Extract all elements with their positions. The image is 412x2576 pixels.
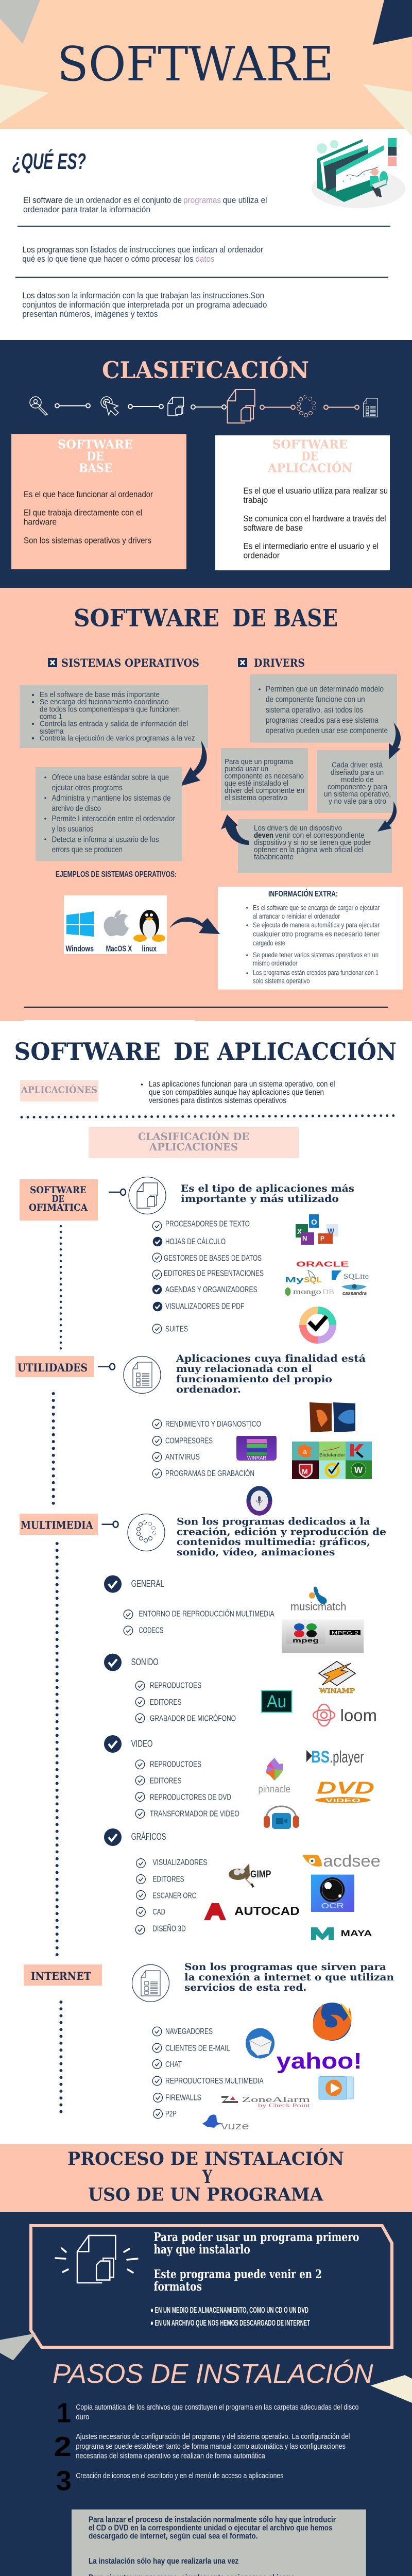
arrow xyxy=(169,917,220,934)
note: lanzar instalación: el CD o DVD en la correspondiente unidad o ejecutar el archivo que hemos xyxy=(89,2523,332,2532)
box: sistema operativo functions xyxy=(20,685,208,748)
icon row xyxy=(30,389,377,423)
logo: loom: loom xyxy=(340,1706,377,1725)
panel: información extra: mismo ordenador xyxy=(253,959,298,967)
logo: acdsee: acdsee xyxy=(323,1852,381,1870)
panel: información extra: Se ejecuta de manera automática y para ejecutar xyxy=(253,921,380,929)
box: each driver: y no vale para otro xyxy=(329,797,386,806)
box: drivers definition: programas creados para ese sistema xyxy=(266,716,379,725)
box: each driver: componente y para xyxy=(328,783,388,791)
list: multimedia categories: VIDEO xyxy=(131,1738,152,1749)
logo: dvd video: VIDEO xyxy=(325,1798,360,1804)
panel: software de aplicación: Es el intermediario entre el usuario y el xyxy=(243,541,379,551)
box: drivers requirement: componente es necesario xyxy=(225,772,304,781)
text: utilidades description: ordenador. xyxy=(176,1384,241,1395)
logo: windows media player xyxy=(319,2076,354,2099)
panel: información extra: solo sistema operativo xyxy=(253,977,310,985)
box: each driver: un sistema operativo, xyxy=(324,790,391,799)
labels: OS names: MacOS X xyxy=(106,945,132,954)
logos: antivirus grid: Bitdefender xyxy=(319,1452,345,1458)
text: instalar: Para poder usar un programa primero xyxy=(153,2230,359,2244)
intro text: software: ordenador para tratar la información xyxy=(23,205,150,214)
logo: thunderbird xyxy=(246,2028,274,2059)
logos: databases: My xyxy=(285,1276,304,1284)
icon: office logos xyxy=(296,1214,338,1245)
icon: microphone xyxy=(246,1486,272,1516)
text: internet description: servicios de esta red. xyxy=(184,1982,306,1993)
logo: mpeg: MPEG-2 xyxy=(332,1630,358,1635)
panel: OS logos xyxy=(64,895,167,954)
panel: software de aplicación: software de base xyxy=(243,523,303,533)
category: ofimática xyxy=(20,1177,369,1340)
logo: musicmatch xyxy=(290,1587,346,1613)
text: internet description: Son los programas que sirven para xyxy=(184,1961,386,1973)
list: multimedia categories: TRANSFORMADOR DE VIDEO xyxy=(150,1809,239,1818)
list: utilidades tools: ANTIVIRUS xyxy=(165,1453,200,1462)
box: drivers availability: optener en la página web oficial del xyxy=(254,845,364,854)
logos: antivirus grid: a xyxy=(303,1447,307,1455)
panel: software de aplicación: SOFTWARE xyxy=(272,438,348,452)
list: ofimática tools: GESTORES DE BASES DE DATOS xyxy=(164,1254,262,1263)
text: instalar: formatos xyxy=(153,2280,202,2294)
list: multimedia categories xyxy=(104,1575,274,1934)
tag: multimedia xyxy=(20,1514,98,1535)
box: sistema operativo functions: de todos los componentespara que funcionen xyxy=(40,705,180,714)
logos: databases: ORACLE xyxy=(296,1260,349,1268)
logo: autocad: AUTOCAD xyxy=(234,1904,300,1918)
text: ofimática description: importante y más utilizado xyxy=(181,1193,339,1205)
tag: software de ofimática: DE xyxy=(52,1193,64,1205)
box: sistema operativo tasks: errors que se producen xyxy=(52,845,123,854)
box: drivers requirement: driver del componente en xyxy=(225,786,304,795)
text: internet description: la conexión a internet o que utilizan xyxy=(184,1972,394,1983)
tag: aplicaciones xyxy=(20,1080,98,1101)
tag: software de ofimática: SOFTWARE xyxy=(30,1184,87,1196)
logo: pinnacle: pinnacle xyxy=(259,1784,290,1795)
text: aplicaciones description xyxy=(141,1080,335,1105)
panel: software de base: Es el que hace funcionar al ordenador xyxy=(24,489,153,499)
intro text: software: que utiliza el xyxy=(223,195,267,205)
list: ofimática tools: PROCESADORES DE TEXTO xyxy=(165,1220,250,1228)
text: formatos list: ● EN UN MEDIO DE ALMACENAMIENTO, COMO UN CD O UN DVD xyxy=(150,2306,308,2315)
box: sistema operativo tasks: Administra y mantiene los sistemas de xyxy=(52,794,171,803)
heading: clasificación: CLASIFICACIÓN xyxy=(102,357,309,384)
logo: dvd video xyxy=(315,1778,374,1804)
tag: internet xyxy=(24,1964,102,1986)
labels: OS names: linux xyxy=(142,945,157,954)
text: formatos list xyxy=(150,2306,310,2328)
list: internet tools: CHAT xyxy=(165,2060,182,2069)
box: sistema operativo functions: sistema xyxy=(40,727,64,736)
panel: software de base: hardware xyxy=(24,517,57,527)
list: multimedia categories: EDITORES xyxy=(150,1776,182,1786)
panel: proceso de instalación heading xyxy=(0,2144,412,2212)
panel: información extra: cualquier otro programa es necesario tener xyxy=(253,930,380,938)
text: utilidades description: muy relacionada con el xyxy=(176,1363,312,1375)
panel: información extra: al arrancar o reiniciar el ordenador xyxy=(253,912,340,920)
intro text: datos xyxy=(22,291,267,319)
steps: instalación: necesarias del sistema operativo se realizan de forma automática xyxy=(76,2452,265,2461)
steps: instalación: Ajustes necesarios de configuración del programa y del sistema operativo. La configuración del xyxy=(76,2432,350,2441)
callout: formats xyxy=(31,2226,392,2347)
subheading: drivers: DRIVERS xyxy=(254,656,305,669)
logo: ocr app: OCR xyxy=(321,1902,344,1910)
panel: software de base xyxy=(11,434,186,569)
box: sistema operativo tasks: Detecta e informa al usuario de los xyxy=(52,835,159,844)
box: drivers availability: venir con el correspondiente xyxy=(275,831,365,840)
panel: software de aplicación: Es el que el usuario utiliza para realizar su xyxy=(243,486,388,496)
logos: antivirus grid: W xyxy=(354,1465,363,1475)
logos: antivirus grid: M xyxy=(302,1467,308,1476)
panel: software de aplicación: APLICACIÓN xyxy=(267,462,352,475)
text: multimedia description xyxy=(177,1516,386,1558)
intro text: programas: son listados de instrucciones que indican al ordenador xyxy=(76,245,263,255)
title: SOFTWARE xyxy=(57,37,334,92)
tag: clasificación de aplicaciones: CLASIFICACIÓN DE xyxy=(138,1130,249,1143)
list: ofimática tools: HOJAS DE CÁLCULO xyxy=(165,1236,226,1246)
icon: tux penguin xyxy=(133,910,165,942)
tag: utilidades xyxy=(15,1356,94,1377)
tag: clasificación de aplicaciones xyxy=(89,1127,299,1158)
logo: adobe audition: Au xyxy=(267,1692,286,1711)
logo: vuze xyxy=(202,2114,249,2131)
list: multimedia categories: GENERAL xyxy=(131,1579,164,1589)
box: sistema operativo functions: Es el software de base más importante xyxy=(40,690,160,699)
logo: dvd video: DVD xyxy=(317,1778,374,1797)
box: drivers requirement: el sistema operativo xyxy=(225,793,287,802)
list: utilidades tools: PROGRAMAS DE GRABACIÓN xyxy=(165,1468,254,1478)
panel: información extra: INFORMACIÓN EXTRA: xyxy=(268,889,338,899)
panel: software de aplicación xyxy=(215,435,390,570)
list: multimedia categories: SONIDO xyxy=(131,1657,159,1667)
list: multimedia categories: REPRODUCTOES xyxy=(150,1760,201,1769)
logo: maya: MAYA xyxy=(341,1928,372,1938)
logos: databases: mongo xyxy=(293,1288,321,1296)
intro text: datos: son la información con la que trabajan las instrucciones.Son xyxy=(57,291,264,300)
logo: winamp: WINAMP xyxy=(319,1687,355,1694)
logo: pinnacle xyxy=(259,1758,290,1795)
list: multimedia categories: REPRODUCTOES xyxy=(150,1682,201,1690)
box: sistema operativo tasks: Permite l interacción entre el ordenador xyxy=(52,815,176,823)
list: utilidades tools: COMPRESORES xyxy=(165,1436,213,1446)
list: internet tools xyxy=(152,2027,264,2119)
box: sistema operativo tasks: y los usuarios xyxy=(52,825,94,834)
arrow xyxy=(180,740,207,786)
list: multimedia categories: CODECS xyxy=(139,1626,163,1635)
logo: zonealarm xyxy=(221,2096,311,2109)
tag: internet: INTERNET xyxy=(31,1970,91,1982)
heading: pasos de instalación: PASOS DE INSTALACIÓN xyxy=(53,2359,373,2389)
logo: loom xyxy=(313,1704,377,1726)
image: software boxes xyxy=(310,1402,355,1432)
note: lanzar instalación: descargado de internet, según cual sea el formato. xyxy=(89,2532,258,2540)
list: multimedia categories: CAD xyxy=(152,1908,165,1917)
panel: clasificación xyxy=(0,340,412,588)
list: ofimática tools: SUITES xyxy=(165,1325,188,1333)
panel: software de base: Son los sistemas operativos y drivers xyxy=(24,536,151,546)
icon: headphones video xyxy=(264,1806,299,1829)
category: internet xyxy=(24,1961,394,2131)
box: sistema operativo tasks: Ofrece una base estándar sobre la que xyxy=(52,773,169,782)
list: multimedia categories: ESCANER ORC xyxy=(152,1892,196,1901)
text: utilidades description: Aplicaciones cuya finalidad está xyxy=(176,1353,366,1364)
box: each driver: diseñado para un xyxy=(331,768,384,777)
box: sistema operativo functions: Controla las entrada y salida de información del xyxy=(40,720,188,728)
tag: software de ofimática: OFIMÁTICA xyxy=(29,1201,88,1213)
header banner xyxy=(0,0,412,136)
category: multimedia xyxy=(20,1514,386,1940)
list: internet tools: P2P xyxy=(165,2110,177,2119)
panel: software de base: BASE xyxy=(79,462,112,475)
list: multimedia categories: ENTORNO DE REPRODUCCIÓN MULTIMEDIA xyxy=(139,1608,274,1618)
text: instalar: hay que instalarlo xyxy=(153,2243,250,2257)
logo: adobe audition xyxy=(262,1691,291,1713)
text: utilidades description: funcionamiento del propio xyxy=(176,1374,332,1385)
list: ofimática tools: VISUALIZADORES DE PDF xyxy=(165,1302,245,1311)
box: sistema operativo tasks xyxy=(36,767,182,861)
label: ejemplos de sistemas operativos: EJEMPLOS DE SISTEMAS OPERATIVOS: xyxy=(56,870,177,879)
logos: databases: DB xyxy=(322,1288,334,1296)
box: drivers availability: Los drivers de un dispositivo xyxy=(254,824,342,833)
logo: firefox xyxy=(313,2003,352,2041)
logo: yahoo: yahoo! xyxy=(277,2048,362,2074)
logo: gimp xyxy=(229,1863,271,1887)
icon: office logos: W xyxy=(328,1227,335,1235)
intro text: programas xyxy=(22,245,263,264)
logo: maya xyxy=(311,1927,372,1940)
list: multimedia categories: REPRODUCTORES DE DVD xyxy=(150,1793,231,1802)
text: internet description xyxy=(184,1961,394,1993)
logo: ocr app xyxy=(311,1875,354,1912)
box: drivers definition: Permiten que un determinado modelo xyxy=(266,685,384,694)
panel: software de aplicación: trabajo xyxy=(243,495,268,505)
heading: software de base xyxy=(74,604,338,632)
list: internet tools: REPRODUCTORES MULTIMEDIA xyxy=(165,2077,264,2086)
intro text: software: programas xyxy=(183,195,221,205)
panel: software de base: El que trabaja directamente con el xyxy=(24,508,142,518)
box: drivers definition xyxy=(250,674,397,743)
list: utilidades tools xyxy=(152,1419,261,1478)
intro text: programas: datos xyxy=(196,254,215,264)
icon: apple xyxy=(104,910,129,936)
tag: clasificación de aplicaciones: APLICACIONES xyxy=(149,1141,238,1153)
intro text: software: de un ordenador es el conjunto de xyxy=(64,195,182,205)
heading: qué es: ¿QUÉ ES? xyxy=(12,148,86,174)
logos: antivirus grid xyxy=(292,1442,372,1479)
text: multimedia description: contenidos multimedia: gráficos, xyxy=(177,1536,370,1548)
panel: software de aplicación: ordenador xyxy=(243,551,280,561)
box: each driver: Cada driver está xyxy=(332,761,383,770)
list: internet tools: CLIENTES DE E-MAIL xyxy=(165,2044,230,2053)
panel: proceso de instalación heading: Y xyxy=(202,2166,213,2188)
heading: software de base: SOFTWARE xyxy=(74,604,219,632)
tag: utilidades: UTILIDADES xyxy=(18,1361,88,1374)
labels: OS names: Windows xyxy=(66,945,94,954)
intro text: datos: presentan números, imágenes y textos xyxy=(22,309,158,319)
icon: office logos: N xyxy=(302,1234,307,1242)
logo: zonealarm: by Check Point xyxy=(258,2103,310,2109)
intro text: software: El software xyxy=(23,195,63,205)
text: formatos list: ● EN UN ARCHIVO QUE NOS HEMOS DESCARGADO DE INTERNET xyxy=(150,2319,310,2328)
steps: instalación: Creación de iconos en el escritorio y en el menú de acceso a aplicaciones xyxy=(76,2471,283,2480)
panel: proceso de instalación heading: PROCESO DE INSTALACIÓN xyxy=(67,2148,344,2170)
panel: software de base: SOFTWARE xyxy=(58,438,133,452)
icon: checklist circle xyxy=(132,1964,169,2002)
panel: software de aplicación: Se comunica con el hardware a través del xyxy=(243,514,386,523)
text: aplicaciones description: versiones para distintos sistemas operativos xyxy=(149,1096,286,1105)
icon: connector and checklist circle xyxy=(98,1356,161,1393)
arrow xyxy=(221,815,249,845)
box: drivers requirement: pueda usar un xyxy=(225,765,268,773)
category: utilidades xyxy=(15,1353,372,1516)
logo: bs player: BS xyxy=(311,1748,330,1766)
logo: bs player xyxy=(306,1748,364,1766)
panel: información extra: Se puede tener varios sistemas operativos en un xyxy=(253,951,379,959)
icon: windows xyxy=(66,911,94,937)
list: internet tools: NAVEGADORES xyxy=(165,2027,213,2036)
logos: databases: SQL xyxy=(304,1276,322,1284)
box: drivers definition: sistema operativo, así todos los xyxy=(266,706,363,715)
box: sistema operativo tasks: ejcutar otros programs xyxy=(52,784,123,792)
logo: winamp xyxy=(319,1662,355,1694)
list: internet tools: FIREWALLS xyxy=(165,2094,201,2102)
text: aplicaciones description: que son compatibles aunque hay aplicaciones que tienen xyxy=(149,1088,324,1097)
text: utilidades description xyxy=(176,1353,366,1395)
logo: zonealarm: ZoneAlarm xyxy=(242,2096,311,2104)
intro text: programas: Los programas xyxy=(22,245,74,255)
box: drivers definition: de componente funcione con un xyxy=(266,696,365,704)
panel: software de base: DE xyxy=(87,449,104,464)
text: multimedia description: Son los programas dedicados a la xyxy=(177,1516,370,1527)
heading: software de aplicación xyxy=(14,1037,397,1065)
labels: OS names xyxy=(66,945,157,954)
panel: información extra: Los programas están creados para funcionar con 1 xyxy=(253,969,379,977)
logo: gimp: GIMP xyxy=(250,1869,271,1880)
list: multimedia categories: EDITORES xyxy=(150,1698,182,1707)
logo: bs player: .player xyxy=(330,1748,364,1766)
steps: instalación xyxy=(54,2398,358,2497)
panel: proceso de instalación heading: USO DE UN PROGRAMA xyxy=(88,2184,323,2206)
panel: información extra: cargado este xyxy=(253,939,285,947)
list: multimedia categories: GRABADOR DE MICRÓFONO xyxy=(150,1714,236,1723)
steps: instalación: 3 xyxy=(56,2466,72,2497)
list: multimedia categories: EDITORES xyxy=(152,1875,184,1884)
list: ofimática tools: EDITORES DE PRESENTACIONES xyxy=(164,1269,264,1278)
heading: software de aplicación: DE APLICACCIÓN xyxy=(174,1037,397,1065)
steps: instalación: 2 xyxy=(54,2431,72,2462)
tag: multimedia: MULTIMEDIA xyxy=(21,1519,93,1531)
icon: office logos: X xyxy=(297,1227,302,1235)
box: drivers availability: fababricante xyxy=(254,853,294,861)
icon: suites ring check xyxy=(303,1310,333,1340)
list: ofimática tools xyxy=(152,1220,264,1333)
text: aplicaciones description: Las aplicaciones funcionan para un sistema operativo, con el xyxy=(149,1080,335,1089)
logo: mpeg: mpeg xyxy=(293,1637,319,1644)
icon: office logos: P xyxy=(320,1235,324,1242)
logo: winrar xyxy=(236,1436,277,1461)
heading: software de aplicación: SOFTWARE xyxy=(14,1038,161,1065)
note: lanzar instalación: Para lanzar el proceso de instalación normalmente sólo hay que introducir xyxy=(89,2515,336,2524)
text: instalar xyxy=(153,2230,359,2294)
tag: software de ofimática xyxy=(20,1179,98,1221)
list: utilidades tools: RENDIMIENTO Y DIAGNOSTICO xyxy=(165,1420,261,1429)
logo: autocad xyxy=(204,1903,300,1920)
icon: connector and document circle xyxy=(109,1177,166,1214)
intro text: software xyxy=(23,195,267,214)
box: sistema operativo functions: Controla la ejecución de varios programas a la vez xyxy=(40,734,195,743)
list: ofimática tools: AGENDAS Y ORGANIZADORES xyxy=(165,1285,258,1294)
box: drivers availability: deven xyxy=(254,831,273,840)
text: multimedia description: creación, edición y reproducción de xyxy=(177,1526,386,1537)
logos: databases: cassandra xyxy=(342,1291,367,1297)
tag: aplicaciones: APLICACIÓNES xyxy=(21,1084,97,1095)
text: multimedia description: sonido, vídeo, animaciones xyxy=(177,1547,335,1558)
logo: mpeg xyxy=(282,1620,364,1653)
intro text: datos: conjuntos de información que interpretada por un programa adecuado xyxy=(22,300,267,310)
logo: acdsee xyxy=(302,1852,381,1870)
list: multimedia categories: GRÁFICOS xyxy=(131,1832,166,1842)
box: drivers requirement xyxy=(221,748,308,811)
logos: databases xyxy=(285,1260,369,1297)
arrow xyxy=(377,802,397,832)
panel: información extra xyxy=(218,887,403,990)
box: drivers availability xyxy=(238,819,392,873)
text: instalar: Este programa puede venir en 2 xyxy=(153,2267,322,2281)
arrow xyxy=(389,722,401,759)
icon: connector and loading circle xyxy=(102,1514,165,1551)
box: each driver xyxy=(317,750,397,813)
steps: instalación: Copia automática de los archivos que constituyen el programa en las carpetas adecuadas del disco xyxy=(76,2403,358,2412)
icon: office logos: O xyxy=(311,1218,317,1227)
intro text: programas: qué es lo que tiene que hacer o cómo procesar los xyxy=(22,254,193,264)
text: ofimática description xyxy=(181,1183,354,1205)
box: drivers availability: dispositivo y si no se tienen que poder xyxy=(254,838,371,847)
steps: instalación: 1 xyxy=(57,2398,71,2429)
subheading: sistemas operativos: SISTEMAS OPERATIVOS xyxy=(61,656,199,669)
box: each driver: modelo de xyxy=(341,775,374,784)
panel: información extra: Es el software que se encarga de cargar o ejecutar xyxy=(253,904,380,911)
box: sistema operativo tasks: archivo de disco xyxy=(52,804,101,813)
logos: databases: SQLite xyxy=(344,1273,369,1281)
list: multimedia categories: DISEÑO 3D xyxy=(152,1923,186,1933)
heading: software de base: DE BASE xyxy=(233,604,338,632)
steps: instalación: duro xyxy=(76,2413,89,2421)
note: lanzar instalación: La instalación sólo hay que realizarla una vez xyxy=(89,2557,238,2566)
logo: musicmatch: musicmatch xyxy=(290,1601,346,1613)
note: lanzar instalación xyxy=(72,2510,366,2576)
intro text: datos: Los datos xyxy=(22,291,56,300)
box: drivers requirement: que esté instalado el xyxy=(225,779,288,788)
text: ofimática description: Es el tipo de aplicaciones más xyxy=(181,1183,354,1194)
panel: instalación y eliminación xyxy=(0,2212,412,2576)
panel: software de base section xyxy=(0,588,412,1021)
icon: document with rays xyxy=(56,2235,138,2283)
panel: software de aplicación: DE xyxy=(301,449,318,464)
box: sistema operativo functions: como 1 xyxy=(40,713,62,721)
logo: vuze: vuze xyxy=(221,2121,249,2131)
logo: winrar: WINRAR xyxy=(247,1455,266,1461)
box: sistema operativo functions: Se encarga del fucionamiento coordinado xyxy=(40,698,169,706)
box: drivers definition: operativo pueden usar ese componente xyxy=(266,726,388,735)
box: drivers requirement: Para que un programa xyxy=(225,757,294,766)
list: multimedia categories: VISUALIZADORES xyxy=(152,1858,207,1867)
illustration: person with laptop and code windows xyxy=(312,138,405,208)
steps: instalación: programa se puede establecer tanto de forma manual como automática y las configuraciones xyxy=(76,2442,346,2451)
